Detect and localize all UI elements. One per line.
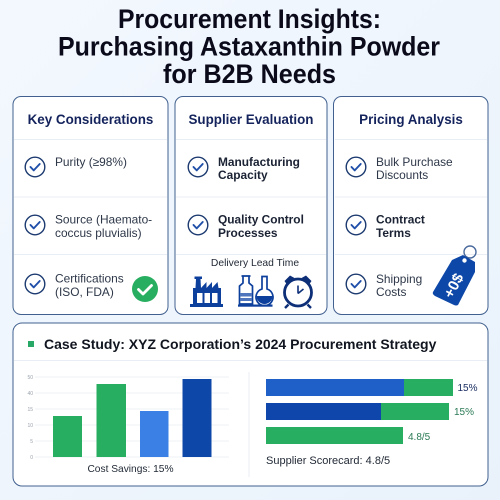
title: for B2B Needs [163,59,336,89]
heading: key considerations: Key Considerations [28,112,153,127]
item: manufacturing capacity [188,155,300,182]
title [58,4,440,89]
icon: lab bottle and flask [238,276,273,307]
item: contract terms: Contract [376,212,425,226]
icon: green check badge [132,276,158,302]
item: certifications: Certifications [55,272,124,286]
item: shipping costs: Costs [376,285,406,299]
title: Procurement Insights: [118,4,381,34]
item: contract terms [346,212,425,240]
chart label: supplier scorecard: Supplier Scorecard: 4.8/5 [266,455,390,467]
text: delivery lead time: Delivery Lead Time [211,258,299,269]
item: certifications [25,272,124,299]
item: manufacturing capacity: Manufacturing [218,155,300,169]
heading: supplier evaluation: Supplier Evaluation [188,112,314,127]
icon: price tag: +0$ [441,270,468,301]
item: shipping costs [346,272,422,299]
bar chart: cost savings: 15 [27,407,33,413]
item: bulk purchase [346,155,453,182]
item: quality control: Quality Control [218,212,304,226]
chart label: cost savings: Cost Savings: 15% [87,464,174,475]
bar chart: cost savings: 10 [27,423,33,429]
item: purity [25,155,127,177]
item: source: coccus pluvialis) [55,226,142,240]
panel: pricing analysis [334,96,488,314]
bar chart: supplier scorecard [266,379,478,467]
bar chart: cost savings: 40 [27,391,33,397]
bar chart: cost savings: 5 [30,439,33,445]
bar chart: cost savings [27,375,229,475]
icon: factory [190,276,223,307]
item: source [25,212,152,240]
item: quality control [188,212,304,240]
heading: case study: Case Study: XYZ Corporation’s 2024 Procurement Strategy [44,336,437,352]
icon: alarm clock [284,276,312,308]
panel: key considerations [13,96,168,314]
bar chart: supplier scorecard: 15% [458,383,478,394]
bar chart: cost savings: 50 [27,375,33,381]
bar chart: supplier scorecard: 15% [454,407,474,418]
bar chart: cost savings: 0 [30,455,33,461]
item: quality control: Processes [218,226,278,240]
bar chart: supplier scorecard: 4.8/5 [408,432,431,443]
panel: supplier evaluation [175,96,327,314]
item: manufacturing capacity: Capacity [218,168,268,182]
item: bulk purchase: Bulk Purchase [376,155,453,169]
heading: pricing analysis: Pricing Analysis [359,112,463,127]
panel: case study [13,323,488,486]
item: bulk purchase: Discounts [376,168,428,182]
title: Purchasing Astaxanthin Powder [58,32,440,62]
item: shipping costs: Shipping [376,272,422,286]
item: certifications: (ISO, FDA) [55,285,114,299]
icon: price tag [433,246,476,306]
item: source: Source (Haemato- [55,212,152,226]
item: contract terms: Terms [376,226,411,240]
item: purity: Purity (≥98%) [55,155,127,169]
